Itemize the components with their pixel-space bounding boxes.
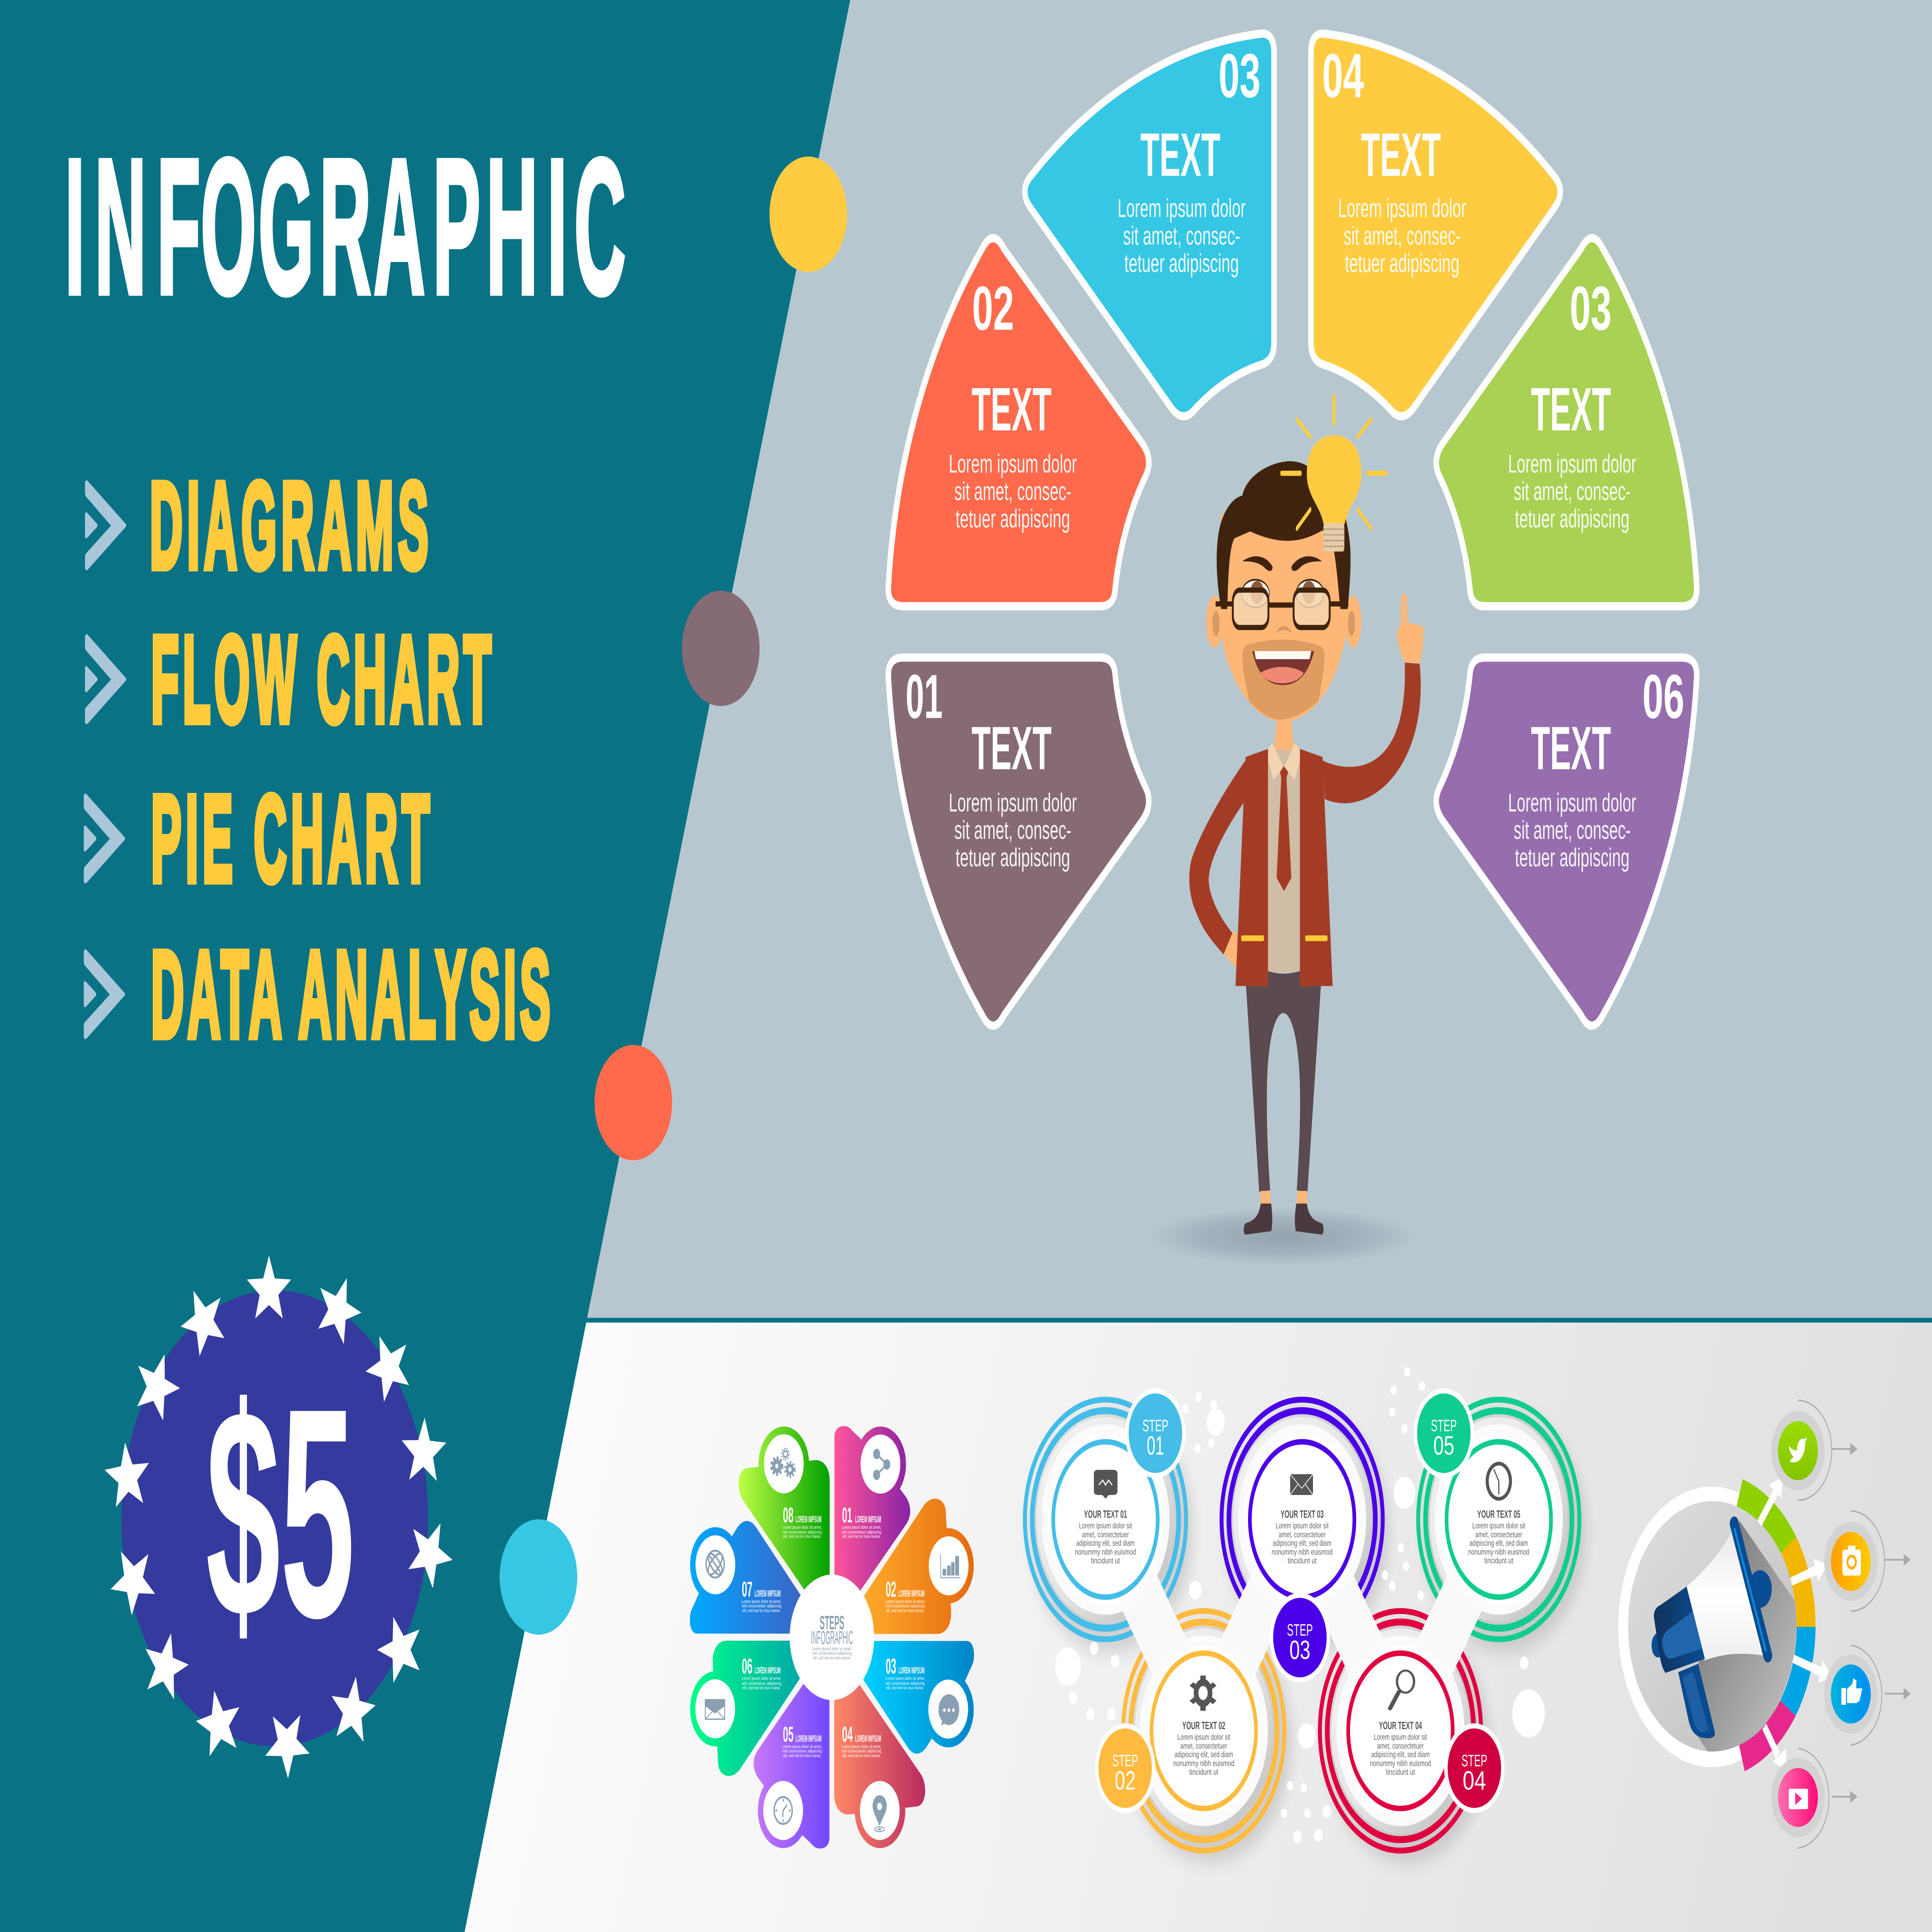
step 01 circle: Lorem ipsum dolor sit [1079,1521,1132,1530]
panel: segment 03 cyan: Lorem ipsum dolor [1117,194,1246,223]
panel: segment 03 green [1436,238,1697,606]
panel: segment 02 red: tetuer adipiscing [956,504,1070,533]
badge: step 03: 03 [1289,1636,1310,1665]
step 08 text: neli consectetuer adipiscing [782,1530,822,1535]
petal 07 [690,1521,833,1634]
decorative dots [1055,1367,1545,1844]
step 02 text [885,1578,925,1614]
flower steps infographic: INFOGRAPHIC [811,1627,853,1648]
icon: share [873,1449,890,1480]
step 01 text: elit, sed mar lor mius marea. [842,1534,881,1539]
step 05 text: LOREM IMPSUM [796,1734,821,1744]
step 01 circle [1048,1434,1163,1605]
centre text: elit, sed mar lor mius marea. [813,1656,851,1661]
icon: mail [1290,1474,1313,1495]
step 01 circle: adipiscing elit, sed diam [1076,1539,1135,1548]
step 05 text: elit, sed mar lor mius marea. [783,1753,821,1759]
step 05 circle [1442,1434,1556,1605]
step 07 text: Lorem ipsum dolor sit amet, [742,1599,781,1604]
step 06 text: elit, sed mar lor mius marea. [743,1686,781,1690]
soft shadows [1030,1410,1586,1863]
panel: segment 04 yellow: tetuer adipiscing [1345,249,1459,277]
step 06 text: LOREM IMPSUM [755,1666,781,1676]
step 04 circle: Lorem ipsum dolor sit [1374,1733,1427,1742]
tie [1277,766,1291,891]
left hand [1224,932,1239,968]
panel: segment 06 purple: sit amet, consec- [1514,816,1631,844]
megaphone social graphic [1618,1400,1911,1848]
petal 06 [690,1641,833,1776]
badge: step 03 [1270,1593,1330,1682]
step 02 circle: nonummy nibh euismod [1173,1759,1235,1768]
badge: step 04: STEP [1461,1751,1487,1770]
step 03 text: 03 [886,1655,896,1679]
step 03 text [885,1655,925,1690]
panel: segment 06 purple [1436,658,1697,1026]
step 05 circle: adipiscing elit, sed diam [1469,1539,1528,1548]
panel: segment 03 cyan: tetuer adipiscing [1124,249,1239,277]
rear knob [1651,1633,1664,1657]
icon: bars [940,1554,960,1578]
step 01 circle: amet, consectetuer [1082,1530,1129,1539]
tongue [1260,667,1304,683]
step 04 circle: adipiscing elit, sed diam [1371,1750,1430,1759]
feature list [84,457,550,1063]
panel: segment 03 green: Lorem ipsum dolor [1508,449,1636,478]
arrow to thumb [1793,1655,1832,1683]
step 02 text: elit, sed mar lor mius marea. [886,1609,924,1614]
icon: chevron pie chart [84,794,125,883]
badge: step 02: 02 [1115,1766,1136,1796]
step 07 text: neli consectetuer adipiscing [742,1604,781,1609]
divider line [579,1318,1932,1323]
badge: step 05: STEP [1431,1416,1457,1435]
step 02 text: Lorem ipsum dolor sit amet, [885,1599,925,1604]
lower light background [0,1322,1932,1932]
step 01 text: neli consectetuer adipiscing [842,1530,881,1535]
trousers [1246,986,1321,1192]
social node video [1771,1748,1857,1848]
step 07 text [742,1578,781,1614]
left arm [1189,760,1246,954]
icon: chevron flow chart [85,634,126,724]
centre text: neli consectetuer adipiscing [812,1651,852,1656]
badge: step 02 [1095,1723,1155,1813]
step 02 circle: adipiscing elit, sed diam [1175,1750,1233,1759]
step 02 text: neli consectetuer adipiscing [885,1604,925,1609]
panel: segment 01 mauve: tetuer adipiscing [956,843,1070,872]
panel: segment 01 mauve: 01 [906,662,942,731]
collar [1268,743,1300,780]
panel: segment 02 red: Lorem ipsum dolor [949,449,1077,478]
upper gray background [0,0,1932,1319]
centre text: STEPS [820,1612,844,1634]
badge: step 01: STEP [1143,1416,1168,1435]
arrow to twitter [1757,1477,1782,1526]
panel: segment 02 red: sit amet, consec- [954,477,1071,505]
petal 03 [831,1641,974,1754]
step 02 circle: YOUR TEXT 02 [1182,1719,1225,1731]
panel: segment 03 green: tetuer adipiscing [1515,504,1629,533]
centre text: Lorem ipsum dolor sit amet, [812,1647,852,1652]
badge: step 01: 01 [1147,1431,1164,1461]
step 06 text: Lorem ipsum dolor sit amet, [742,1676,781,1681]
step 04 text [842,1723,881,1759]
step 03 text: neli consectetuer adipiscing [885,1681,925,1686]
step 02 text: 02 [886,1578,896,1602]
icon: chevron diagrams [85,480,126,570]
icon: gears [771,1449,795,1476]
teeth [1254,651,1311,659]
long shadow [1694,1520,1796,1752]
step 04 text: 04 [842,1723,853,1747]
step 04 circle: nonummy nibh euismod [1370,1759,1431,1768]
step 07 text: elit, sed mar lor mius marea. [743,1609,781,1614]
right hand [1397,594,1423,663]
icon: globe [706,1550,724,1578]
bulb [1307,435,1361,524]
step 03 circle: amet, consectetuer [1279,1530,1325,1539]
heading: pie chart: PIE CHART [151,770,430,907]
step 04 circle: YOUR TEXT 04 [1379,1719,1422,1731]
step 03 circle: tincidunt ut [1287,1556,1316,1565]
step 02 circle [1146,1646,1261,1816]
eyebrows [1242,556,1322,571]
panel: segment 01 mauve: sit amet, consec- [954,816,1071,844]
step 01 text: Lorem ipsum dolor sit amet, [842,1525,881,1530]
step 07 text: 07 [742,1578,752,1602]
arrow to camera [1791,1559,1828,1586]
flower steps infographic [690,1426,974,1849]
icon: location pin [872,1795,887,1832]
step 01 circle: nonummy nibh euismod [1075,1548,1136,1556]
step 02 circle: Lorem ipsum dolor sit [1177,1733,1230,1742]
step 05 text: 05 [783,1723,794,1747]
icon: gear [1191,1675,1215,1711]
step 03 circle: adipiscing elit, sed diam [1273,1539,1332,1548]
radial diagram [888,34,1697,1026]
panel: segment 01 mauve [888,658,1149,1026]
step 03 circle: nonummy nibh euismod [1272,1548,1333,1556]
step 03 text: LOREM IMPSUM [898,1666,925,1676]
megaphone rim [1734,1524,1768,1655]
step 03 circle [1245,1434,1359,1605]
badge: step 02: STEP [1112,1751,1138,1770]
panel: segment 03 cyan: TEXT [1140,120,1220,189]
ankles [1260,1191,1307,1206]
step 04 text: elit, sed mar lor mius marea. [842,1753,881,1759]
neck [1274,720,1294,769]
petal 08 [739,1427,830,1639]
shirt [1268,750,1300,972]
badge: step 04 [1444,1723,1505,1813]
panel: segment 04 yellow: sit amet, consec- [1344,221,1461,250]
panel: segment 03 cyan [1025,34,1274,416]
step 05 text [782,1723,822,1759]
panel: segment 06 purple: TEXT [1531,713,1611,782]
belt [1268,971,1300,987]
step 01 text: 01 [842,1503,852,1527]
step 04 text: neli consectetuer adipiscing [842,1749,881,1754]
character with light bulb [1148,397,1423,1265]
panel: segment 02 red: TEXT [971,375,1052,444]
arc segment blue [1781,1627,1816,1716]
eyes [1242,580,1269,607]
petal 04 [834,1636,925,1848]
panel: segment 06 purple: Lorem ipsum dolor [1508,788,1636,817]
glasses [1216,590,1349,628]
megaphone body [1654,1587,1705,1673]
step 01 text: LOREM IMPSUM [855,1515,881,1525]
step 08 text: LOREM IMPSUM [796,1515,821,1525]
back knob [1748,1570,1772,1608]
arc segment yellow [1781,1537,1816,1627]
step 05 circle: Lorem ipsum dolor sit [1472,1521,1525,1530]
icon: chat square [1094,1470,1117,1499]
badge: step 05 [1413,1388,1474,1478]
step 01 circle: tincidunt ut [1091,1556,1120,1565]
panel: segment 06 purple: tetuer adipiscing [1515,843,1629,872]
circle step icons [1094,1462,1512,1711]
badge: step 01 [1125,1388,1185,1478]
panel: segment 04 yellow: Lorem ipsum dolor [1338,194,1466,223]
panel: segment 02 red [888,238,1149,606]
left teal panel [0,0,850,1932]
step 03 circle: YOUR TEXT 03 [1281,1508,1324,1520]
floor shadow [1148,1208,1417,1265]
bulb rays [1281,397,1387,529]
shaded discs [1036,1417,1568,1833]
heading: flow chart: FLOW CHART [151,611,492,748]
social node thumb [1824,1645,1911,1745]
arc segment green [1736,1479,1796,1553]
badge: step 05: 05 [1434,1431,1454,1461]
step 04 circle [1343,1646,1458,1816]
social node twitter [1771,1400,1857,1500]
price badge [100,1255,456,1780]
mouth [1252,651,1314,685]
panel: segment 03 green: sit amet, consec- [1514,477,1631,505]
heading: diagrams: DIAGRAMS [150,457,428,594]
step 02 text: LOREM IMPSUM [898,1589,925,1599]
heading: data analysis: DATA ANALYSIS [151,925,550,1063]
title: INFOGRAPHIC [65,119,626,334]
panel: segment 04 yellow [1311,34,1560,416]
megaphone cone [1687,1529,1763,1660]
white inner discs [1041,1424,1563,1826]
white connector [1105,1519,1499,1731]
hair [1217,461,1350,609]
step 03 text: Lorem ipsum dolor sit amet, [885,1676,925,1681]
step 01 text [842,1503,881,1539]
step 03 circle: Lorem ipsum dolor sit [1276,1521,1328,1530]
icon: chat [939,1694,959,1726]
face [1221,514,1347,721]
panel: segment 03 green: 03 [1570,274,1612,343]
step 05 circle: tincidunt ut [1484,1556,1513,1565]
panel: segment 06 purple: 06 [1643,662,1684,731]
inner disc [1628,1501,1797,1752]
handle [1678,1664,1715,1738]
step 03 text: elit, sed mar lor mius marea. [886,1686,924,1690]
step 06 text [742,1655,781,1690]
beard [1242,639,1325,719]
panel: segment 01 mauve: TEXT [971,713,1052,782]
white ring [1618,1486,1805,1767]
step 05 text: neli consectetuer adipiscing [782,1749,822,1754]
panel: segment 01 mauve: Lorem ipsum dolor [949,788,1077,817]
connected circle steps [1025,1367,1586,1863]
badge: step 04: 04 [1463,1766,1486,1796]
social node camera [1824,1511,1911,1611]
step 04 circle: tincidunt ut [1386,1767,1415,1777]
petal 02 [831,1498,974,1634]
decorative circles on panel edge [500,156,847,1634]
step 05 circle: YOUR TEXT 05 [1477,1508,1520,1520]
bulb socket [1323,523,1344,551]
shoes [1244,1204,1323,1235]
step 07 text: LOREM IMPSUM [755,1589,781,1599]
icon: magnifier [1390,1670,1414,1708]
panel: segment 04 yellow: 04 [1322,41,1364,111]
panel: segment 02 red: 02 [972,274,1014,343]
panel: segment 04 yellow: TEXT [1361,120,1441,189]
petal 05 [753,1636,830,1849]
step 02 circle: amet, consectetuer [1180,1742,1227,1750]
step 04 text: LOREM IMPSUM [855,1734,881,1744]
step 01 circle: YOUR TEXT 01 [1084,1508,1127,1520]
icon: clock [774,1797,792,1824]
panel: segment 03 green: TEXT [1531,375,1611,444]
badge: step 03: STEP [1287,1621,1313,1639]
price text: $5 [206,1346,355,1680]
step 08 text [782,1503,822,1539]
step 06 text: neli consectetuer adipiscing [742,1681,781,1686]
step 04 circle: amet, consectetuer [1377,1742,1424,1750]
step 06 text: 06 [742,1655,752,1679]
outer rings [1025,1400,1579,1850]
step 02 circle: tincidunt ut [1189,1767,1218,1777]
arrow to video [1762,1724,1786,1770]
right arm [1323,663,1421,803]
step 05 circle: nonummy nibh euismod [1468,1548,1529,1556]
icon discs [695,1434,969,1840]
centre text [811,1612,853,1661]
icon: clock [1486,1462,1512,1501]
petal 01 [834,1426,910,1639]
icon: envelope [705,1699,725,1720]
centre disc [790,1575,874,1700]
pockets [1241,935,1328,941]
step 08 text: 08 [783,1503,794,1527]
nose [1276,626,1293,633]
ears [1206,596,1223,648]
step 08 text: elit, sed mar lor mius marea. [783,1534,821,1539]
panel: segment 03 cyan: 03 [1219,41,1260,111]
jacket [1236,749,1333,986]
step 05 text: Lorem ipsum dolor sit amet, [782,1745,822,1749]
step 05 circle: amet, consectetuer [1475,1530,1522,1539]
step 04 text: Lorem ipsum dolor sit amet, [842,1745,881,1749]
arc segment pink [1739,1701,1796,1771]
panel: segment 03 cyan: sit amet, consec- [1123,221,1240,250]
icon: chevron data analysis [84,949,125,1039]
step 08 text: Lorem ipsum dolor sit amet, [782,1525,822,1530]
